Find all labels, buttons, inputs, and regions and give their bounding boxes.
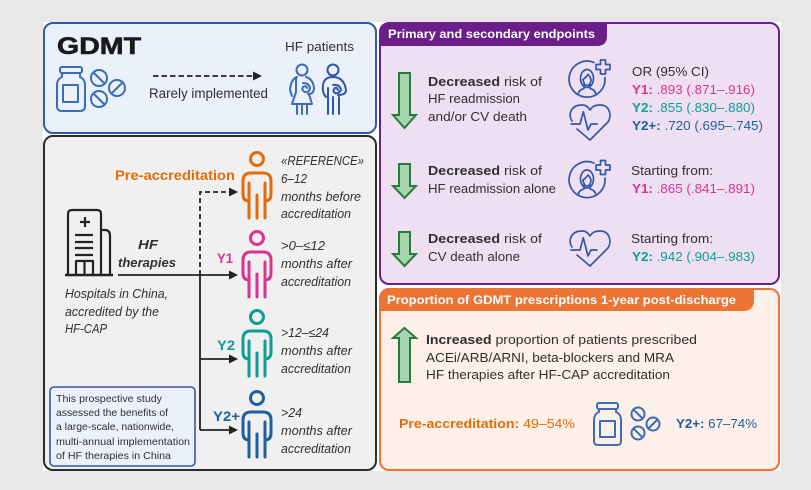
panel header xyxy=(380,289,754,311)
text: HF readmission and/or CV death: and/or CV death xyxy=(428,109,527,124)
text: CV death alone: CV death alone xyxy=(428,249,520,264)
callout: study description: a large-scale, nationwide, xyxy=(56,421,174,433)
text: Y1 period: months after xyxy=(281,256,353,271)
text: Y1 period: >0–≤12 xyxy=(281,238,326,253)
text: Y2 period: accreditation xyxy=(281,361,351,376)
label: hospitals in China: accredited by the xyxy=(65,304,159,319)
callout: study description: assessed the benefits of xyxy=(56,407,168,419)
panel header xyxy=(380,23,607,46)
callout: study description: of HF therapies in China xyxy=(56,450,171,462)
label: hospitals in China xyxy=(65,286,168,336)
icon: medicine bottle and pills xyxy=(57,67,125,111)
arrows: timeline branches xyxy=(118,188,238,434)
stat: pre-accreditation: Pre-accreditation: 49–54% xyxy=(399,416,575,431)
text: HF readmission alone: Decreased risk of xyxy=(428,163,542,178)
label: hospitals in China: HF-CAP xyxy=(65,321,107,336)
text: Y2 period xyxy=(281,325,353,376)
text: Y1 period: accreditation xyxy=(281,274,351,289)
label: HF patients: HF patients xyxy=(285,39,355,54)
icon: person orange xyxy=(243,152,271,218)
heading: prescriptions: Proportion of GDMT prescriptions 1-year post-discharge xyxy=(387,295,736,307)
text: Y2+ period xyxy=(281,405,353,456)
heading: GDMT: GDMT xyxy=(57,33,141,60)
panel: GDMT prescriptions xyxy=(380,289,779,470)
text: Y1 period xyxy=(281,238,353,289)
text: HF readmission and/or CV death xyxy=(428,74,542,124)
label: Y1: Y1 xyxy=(217,251,233,266)
results: OR values: Y1: .893 (.871–.916) xyxy=(632,82,755,97)
icon: heart pulse 2 xyxy=(570,231,610,266)
label: rarely implemented: Rarely implemented xyxy=(149,86,268,101)
text: reference period xyxy=(281,153,364,221)
results: CV death xyxy=(631,231,755,264)
text: increased proportion xyxy=(426,332,697,382)
text: CV death alone: Decreased risk of xyxy=(428,231,542,246)
text: Y2+ period: >24 xyxy=(281,405,302,420)
text: increased proportion: Increased proportion of patients prescribed xyxy=(426,332,697,347)
callout: study description: This prospective study xyxy=(56,393,163,405)
icon: heart pulse xyxy=(570,105,610,140)
icon: hospital xyxy=(65,210,113,275)
icon: female patient xyxy=(290,64,314,114)
callout: study description xyxy=(50,387,195,466)
label: HF therapies xyxy=(118,237,176,270)
results: CV death: Starting from: xyxy=(631,231,713,246)
label: hospitals in China: Hospitals in China, xyxy=(65,286,168,301)
text: Y2 period: months after xyxy=(281,343,353,358)
arrow: decreased 3 xyxy=(393,232,416,266)
text: reference period: 6–12 xyxy=(281,171,308,186)
icon: patient head 2 xyxy=(569,160,610,198)
results: readmission: Y1: .865 (.841–.891) xyxy=(632,181,755,196)
text: reference period: «REFERENCE» xyxy=(281,153,364,168)
label: HF therapies: therapies xyxy=(118,255,176,270)
icon: person teal xyxy=(243,310,271,376)
label: pre-accreditation: Pre-accreditation xyxy=(115,168,235,183)
results: OR values: Y2: .855 (.830–.880) xyxy=(632,100,755,115)
text: HF readmission and/or CV death: Decreased risk of xyxy=(428,74,542,89)
icon: person blue xyxy=(243,392,271,457)
panel: primary and secondary endpoints xyxy=(380,23,779,284)
icon: person pink xyxy=(243,232,271,297)
text: increased proportion: ACEi/ARB/ARNI, beta-blockers and MRA xyxy=(426,350,674,365)
results: OR values xyxy=(632,64,763,133)
results: CV death: Y2: .942 (.904–.983) xyxy=(632,249,755,264)
arrow: increased xyxy=(393,328,416,382)
results: OR values: OR (95% CI) xyxy=(632,64,709,79)
text: CV death alone xyxy=(428,231,542,264)
results: readmission xyxy=(631,163,755,196)
text: HF readmission alone xyxy=(428,163,556,196)
text: Y2+ period: months after xyxy=(281,423,353,438)
text: increased proportion: HF therapies after HF-CAP accreditation xyxy=(426,367,670,382)
text: reference period: accreditation xyxy=(281,206,351,221)
callout: study description: multi-annual implementation xyxy=(56,436,190,448)
panel: GDMT xyxy=(44,23,376,133)
results: OR values: Y2+: .720 (.695–.745) xyxy=(632,118,763,133)
text: HF readmission alone: HF readmission alone xyxy=(428,181,556,196)
text: Y2 period: >12–≤24 xyxy=(281,325,329,340)
arrow: decreased 2 xyxy=(393,164,416,198)
heading: endpoints: Primary and secondary endpoints xyxy=(388,29,595,41)
label: HF therapies: HF xyxy=(138,237,159,252)
results: readmission: Starting from: xyxy=(631,163,713,178)
panel: study design xyxy=(44,136,376,470)
label: Y2: Y2 xyxy=(217,338,235,353)
icon: male patient xyxy=(323,64,346,114)
label: Y2+: Y2+ xyxy=(213,409,240,424)
arrow: decreased 1 xyxy=(393,73,416,128)
icon: patient head xyxy=(569,60,610,97)
icon: bottle and pills xyxy=(594,403,660,445)
arrow: rarely implemented dashed xyxy=(153,72,262,80)
text: Y2+ period: accreditation xyxy=(281,441,351,456)
text: HF readmission and/or CV death: HF readmission xyxy=(428,91,520,106)
text: reference period: months before xyxy=(281,189,361,204)
stat: Y2+: Y2+: 67–74% xyxy=(676,416,757,431)
